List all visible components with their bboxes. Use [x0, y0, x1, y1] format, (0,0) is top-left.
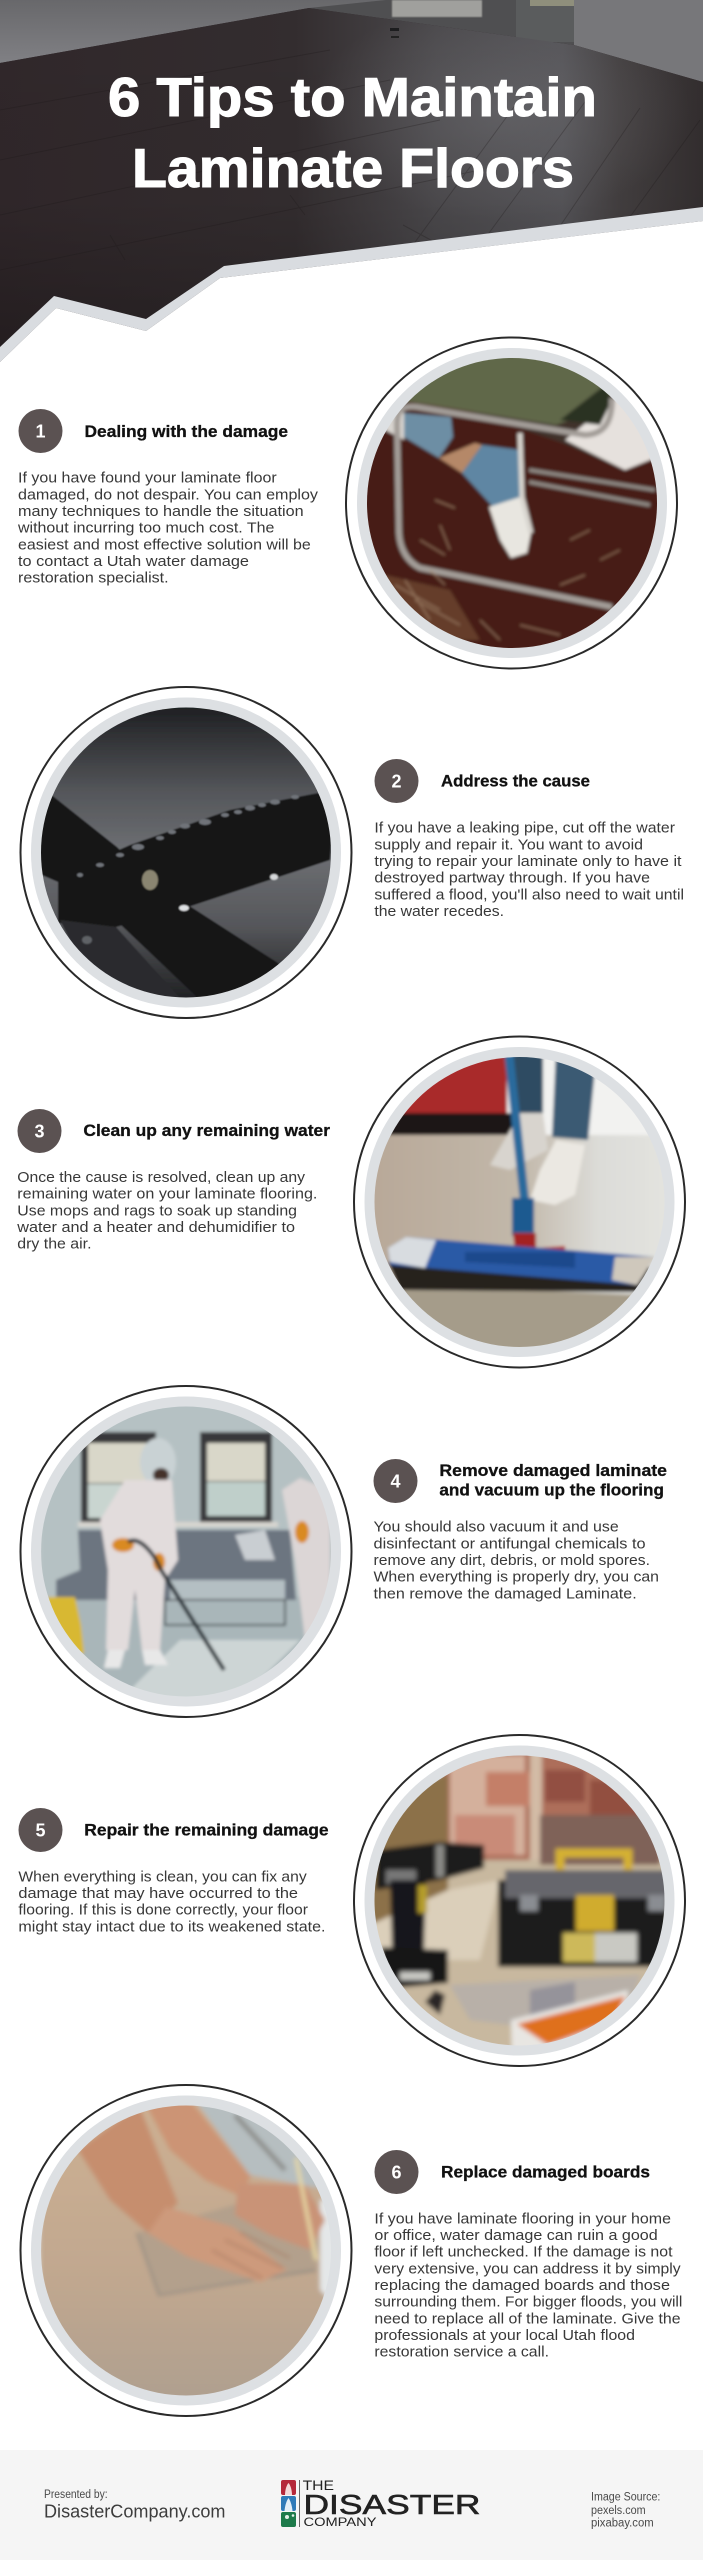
title: 6 Tips to Maintain	[108, 66, 597, 128]
badge number 3	[18, 1109, 62, 1153]
heading tip 4: and vacuum up the flooring	[439, 1480, 664, 1499]
body text tip 6	[374, 2210, 682, 2361]
badge number 3: 3	[34, 1122, 45, 1142]
body text tip 1: to contact a Utah water damage	[18, 553, 249, 570]
body text tip 2: the water recedes.	[374, 903, 504, 920]
badge number 6: 6	[391, 2162, 402, 2182]
body text tip 2	[374, 820, 684, 920]
body text tip 2: If you have a leaking pipe, cut off the water	[374, 820, 675, 837]
badge number 4: 4	[390, 1472, 401, 1492]
body text tip 1: without incurring too much cost. The	[17, 520, 274, 537]
body text tip 3: water and a heater and dehumidifier to	[16, 1219, 295, 1236]
heading tip 1: Dealing with the damage	[84, 422, 288, 441]
footer	[0, 2450, 703, 2560]
body text tip 1: many techniques to handle the situation	[18, 503, 304, 520]
title: Laminate Floors	[132, 137, 574, 199]
body text tip 4: disinfectant or antifungal chemicals to	[374, 1535, 646, 1552]
body text tip 6: replacing the damaged boards and those	[374, 2277, 670, 2294]
body text tip 4	[374, 1519, 659, 1602]
panel: tip 6	[20, 2085, 682, 2416]
badge number 4	[374, 1459, 418, 1503]
body text tip 2: suffered a flood, you'll also need to wait until	[374, 886, 684, 903]
panel: tip 5	[18, 1735, 685, 2066]
panel: tip 2	[20, 687, 684, 1018]
body text tip 1: easiest and most effective solution will be	[18, 536, 311, 553]
badge number 5: 5	[35, 1820, 46, 1840]
decorative wave band below header	[0, 207, 703, 362]
badge number 1: 1	[35, 422, 46, 442]
photo circle tip 2: wet dark pipe	[20, 687, 352, 1018]
body text tip 4: then remove the damaged Laminate.	[374, 1585, 637, 1602]
badge number 5	[18, 1808, 62, 1852]
body text tip 6: restoration service a call.	[374, 2344, 549, 2361]
image sources: Image Source:	[591, 2492, 660, 2504]
badge number 2: 2	[391, 772, 402, 792]
presented by	[44, 2489, 226, 2522]
body text tip 6: If you have laminate flooring in your home	[374, 2210, 671, 2227]
body text tip 3: Use mops and rags to soak up standing	[17, 1202, 297, 1219]
title	[108, 66, 597, 199]
panel: tip 1	[17, 338, 677, 668]
body text tip 5: When everything is clean, you can fix any	[18, 1868, 307, 1885]
body text tip 3: remaining water on your laminate flooring.	[17, 1186, 317, 1203]
panel: tip 3	[16, 1036, 685, 1368]
logo: The Disaster Company: DISASTER	[304, 2489, 480, 2520]
body text tip 6: professionals at your local Utah flood	[374, 2327, 635, 2344]
badge number 6	[374, 2150, 418, 2194]
heading tip 3: Clean up any remaining water	[83, 1121, 330, 1140]
body text tip 6: or office, water damage can ruin a good	[374, 2227, 658, 2244]
body text tip 6: very extensive, you can address it by simply	[374, 2260, 681, 2277]
heading tip 5: Repair the remaining damage	[84, 1820, 329, 1839]
body text tip 5	[18, 1868, 326, 1935]
presented by: Presented by:	[44, 2489, 108, 2501]
panel: tip 4	[20, 1386, 667, 1717]
body text tip 5: damage that may have occurred to the	[18, 1885, 298, 1902]
photo circle tip 4: workers in protective suits vacuuming	[20, 1386, 352, 1717]
badge number 1	[18, 409, 62, 453]
body text tip 3: Once the cause is resolved, clean up any	[17, 1169, 305, 1186]
heading tip 4: Remove damaged laminate	[439, 1461, 667, 1480]
badge number 2	[374, 759, 418, 803]
body text tip 1: restoration specialist.	[18, 570, 169, 587]
logo icon: flame, drop and biohazard tiles	[281, 2480, 296, 2527]
heading tip 4	[439, 1461, 667, 1499]
body text tip 4: remove any dirt, debris, or mold spores.	[374, 1552, 650, 1569]
logo: The Disaster Company	[281, 2478, 480, 2529]
image sources: pixabay.com	[591, 2518, 654, 2530]
photo circle tip 1: foot on damaged floor	[346, 338, 677, 668]
heading tip 2: Address the cause	[441, 772, 590, 791]
photo circle tip 6: hands marking laminate board	[20, 2085, 352, 2416]
body text tip 2: trying to repair your laminate only to have it	[374, 853, 682, 870]
body text tip 3	[16, 1169, 317, 1253]
body text tip 3: dry the air.	[17, 1236, 91, 1253]
body text tip 1	[17, 470, 318, 587]
photo circle tip 3: blue mop on floor	[354, 1036, 685, 1368]
body text tip 4: You should also vacuum it and use	[374, 1519, 619, 1536]
body text tip 2: supply and repair it. You want to avoid	[374, 836, 643, 853]
body text tip 1: If you have found your laminate floor	[18, 470, 277, 487]
presented by: DisasterCompany.com	[44, 2501, 226, 2522]
body text tip 6: need to replace all of the laminate. Give the	[374, 2310, 681, 2327]
white page area under header	[0, 221, 703, 420]
logo: The Disaster Company: COMPANY	[304, 2515, 376, 2529]
body text tip 1: damaged, do not despair. You can employ	[18, 486, 318, 503]
body text tip 6: surrounding them. For bigger floods, you will	[374, 2294, 682, 2311]
body text tip 2: destroyed partway through. If you have	[374, 870, 650, 887]
header photo: dark laminate floor room	[0, 0, 703, 370]
image sources: pexels.com	[591, 2505, 646, 2517]
image sources	[591, 2492, 660, 2530]
body text tip 6: floor if left unchecked. If the damage is not	[374, 2244, 673, 2261]
body text tip 4: When everything is properly dry, you can	[374, 1569, 659, 1586]
heading tip 6: Replace damaged boards	[441, 2162, 650, 2181]
body text tip 5: might stay intact due to its weakened state.	[18, 1918, 326, 1935]
logo: The Disaster Company: THE	[303, 2478, 334, 2493]
body text tip 5: flooring. If this is done correctly, your floor	[18, 1902, 308, 1919]
photo circle tip 5: drill and toolbox	[354, 1735, 685, 2066]
